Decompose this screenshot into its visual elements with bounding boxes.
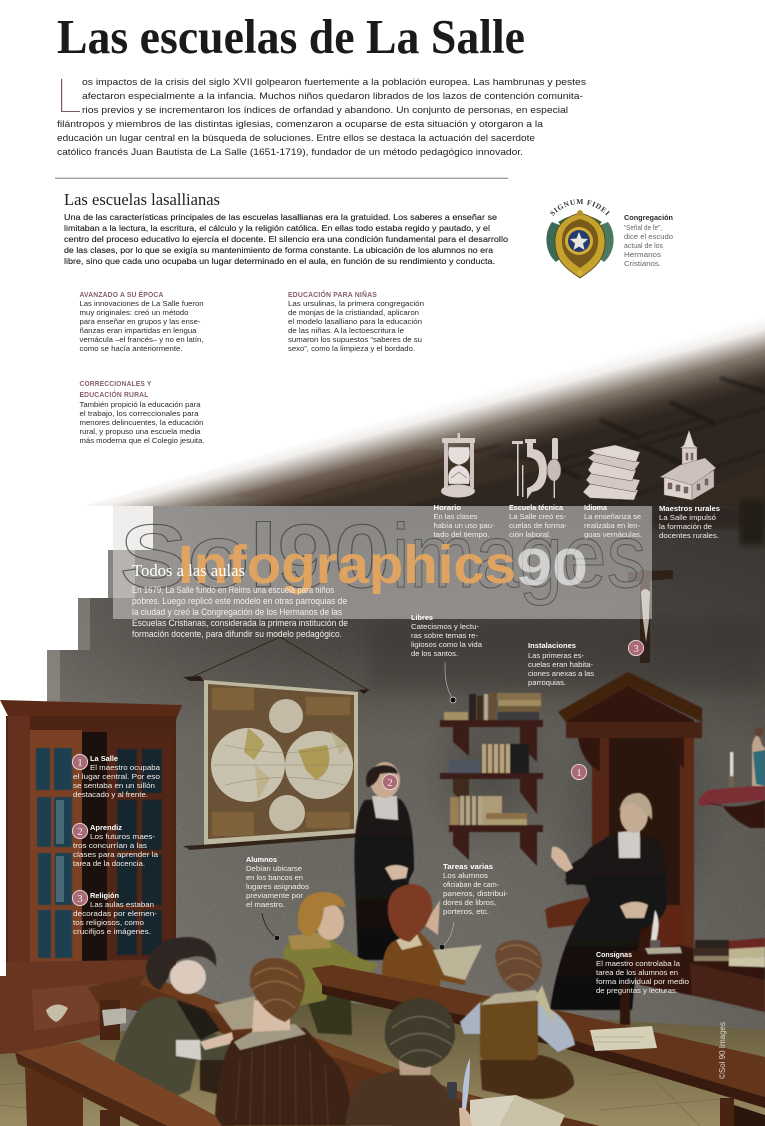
watermark: Sol90 (120, 507, 390, 607)
badge 2 on apprentice (382, 774, 398, 790)
intro text: educación un lugar central en la búsqueda de soluciones. Entre ellos se destaca la actuación del sacerdote (57, 133, 535, 143)
text block: Educación para niñas: EDUCACIÓN PARA NIÑAS (288, 290, 377, 299)
text block: Todos a las aulas: pobres. Luego replicó este modelo en otras parroquias de (132, 596, 347, 606)
text block: Correccionales y educación rural: rural, y propuso una escuela media (80, 427, 201, 436)
text block: Correccionales y educación rural (80, 379, 204, 445)
intro text: rios previos y se incrementaron los índices de orfandad y abandono. Un conjunto de personas, en especial (82, 105, 568, 115)
body text: las escuelas lasallianas (64, 212, 508, 266)
caption: Escuela técnica: La Salle creó es- (509, 512, 567, 521)
callout: Instalaciones: cuelas eran habita- (528, 660, 594, 669)
student bench front row (15, 1042, 235, 1126)
callout: Libres: de los santos. (411, 649, 458, 658)
floor (0, 1000, 765, 1126)
numbered note 1: La Salle: el lugar central. Por eso (73, 772, 160, 781)
callout: Alumnos: Debían ubicarse (246, 864, 302, 873)
world map (183, 637, 370, 850)
caption: Horario: En las clases (434, 512, 478, 521)
numbered note 2: Aprendiz: clases para aprender la (73, 850, 159, 859)
callout: Instalaciones: ciones anexas a las (528, 669, 594, 678)
copyright credit: ©Sol 90 Images (718, 1022, 727, 1079)
callout: Instalaciones: parroquias. (528, 678, 566, 687)
text block: Avanzado a su época: AVANZADO A SU ÉPOCA (80, 290, 164, 299)
callout: Alumnos: lugares asignados (246, 882, 309, 891)
numbered note 1: La Salle (72, 754, 161, 799)
student: green coat (108, 937, 262, 1108)
caption: Horario: Horario (434, 503, 461, 512)
callout: Alumnos: previamente por (246, 891, 304, 900)
badge 1 on chair (571, 764, 587, 780)
icon: tools (512, 438, 561, 499)
student: green shirt (284, 892, 378, 1035)
intro text (57, 70, 586, 157)
text block: Todos a las aulas: la ciudad y creó la Congregación de los Hermanos de las (132, 607, 342, 617)
body text: las escuelas lasallianas: centro del proceso educativo lo ejercía el docente. El silencio era una condición fundamental para el desarrollo (64, 234, 508, 244)
caption: Horario: había un uso pau- (434, 521, 495, 530)
text block: Correccionales y educación rural: También propició la educación para (80, 400, 201, 409)
student: ochre tunic (382, 884, 482, 1010)
canopied chair (540, 670, 730, 960)
callout: Alumnos: el maestro. (246, 900, 285, 909)
callout: Instalaciones: Las primeras es- (528, 651, 585, 660)
caption: Congregación: Cristianos. (624, 259, 661, 268)
numbered note 2: Aprendiz: 2 (77, 826, 83, 838)
ceiling (83, 312, 765, 530)
body text: las escuelas lasallianas: Una de las características principales de las escuelas lasallianas era la gratuidad. Los saberes a enseñar se (64, 212, 497, 222)
caption: Idioma (584, 503, 642, 539)
numbered note 3: Religión: Religión (90, 891, 119, 900)
numbered note 2: Aprendiz: Aprendiz (90, 823, 122, 832)
callout: Alumnos (246, 855, 309, 941)
apprentice (354, 762, 414, 960)
watermark: Infographics (178, 535, 516, 595)
numbered note 3: Religión (72, 890, 158, 936)
callout: Tareas varias: Tareas varias (443, 862, 493, 871)
student: vest (460, 940, 575, 1099)
badge 3 on crucifix: 3 (633, 643, 639, 655)
text block: Educación para niñas: Las ursulinas, la primera congregación (288, 299, 424, 308)
caption: Horario: tado del tiempo. (434, 530, 490, 539)
callout: Libres: Catecismos y lectu- (411, 622, 480, 631)
callout: Tareas varias: porteros, etc. (443, 907, 489, 916)
text block: Todos a las aulas (132, 585, 348, 639)
numbered note 3: Religión: Las aulas estaban (90, 900, 154, 909)
badge 1 on chair: 1 (576, 767, 582, 779)
numbered note 3: Religión: decoradas por elemen- (73, 909, 158, 918)
watermark (113, 506, 652, 619)
heading: Las escuelas lasallianas: Las escuelas lasallianas (64, 190, 220, 209)
caption: Horario (434, 503, 495, 539)
scroll on bench (590, 1026, 657, 1051)
text block: Educación para niñas: de las niñas. A la lectoescritura le (288, 326, 404, 335)
callout: Alumnos: en los bancos en (246, 873, 303, 882)
desk with books (620, 938, 765, 1025)
text block: Avanzado a su época: Las innovaciones de La Salle fueron (80, 299, 204, 308)
callout: Tareas varias: dores de libros, (443, 898, 496, 907)
caption: Congregación: Congregación (624, 213, 673, 222)
icon: hourglass (441, 433, 475, 498)
callout: Tareas varias: paneros, distribui- (443, 889, 509, 898)
icon: emblem Signum Fidei (546, 199, 614, 278)
icon: stack of books (583, 445, 640, 500)
student: striped sweater (215, 958, 351, 1126)
text block: Educación para niñas: de monjas de la cristiandad, aplicaron (288, 308, 419, 317)
callout: Consignas: El maestro controlaba la (596, 959, 681, 968)
caption: Escuela técnica (509, 503, 568, 539)
watermark: images (392, 507, 646, 607)
numbered note 1: La Salle: 1 (77, 757, 83, 769)
text block: Avanzado a su época: ñanzas eran impartidas en lengua (80, 326, 197, 335)
caption: Maestros rurales: La Salle impulsó (659, 513, 716, 522)
icon: emblem Signum Fidei: SIGNUM FIDEI (550, 199, 610, 216)
student bench back row (312, 965, 765, 1126)
intro text: católico francés Juan Bautista de La Salle (1651-1719), fundador de un método pedagógico innovador. (57, 147, 523, 157)
text block: Correccionales y educación rural: más moderna que el Colegio jesuita. (80, 436, 204, 445)
inkwell and quill (447, 1058, 470, 1110)
text block: Correccionales y educación rural: EDUCACIÓN RURAL (80, 390, 149, 399)
text block: Avanzado a su época: vernácula –el francés– y no en latín, (80, 335, 204, 344)
caption: Maestros rurales (659, 504, 720, 540)
text block: Todos a las aulas: En 1679, La Salle fundó en Reims una escuela para niños (132, 585, 334, 595)
body text: las escuelas lasallianas: libre, sino que cada uno ocupaba un lugar determinado en el aula, en función de su rendimiento y conducta. (64, 256, 495, 266)
callout: Instalaciones (528, 641, 594, 687)
text block: Educación para niñas (288, 290, 424, 353)
badge 2 on apprentice: 2 (387, 777, 393, 789)
bookcase (0, 700, 182, 1075)
text block: Todos a las aulas: Escuelas Cristianas, considerada la primera institución de (132, 618, 348, 628)
caption: Congregación: actual de los (624, 241, 663, 250)
numbered note 2: Aprendiz: Los futuros maes- (90, 832, 156, 841)
text block: Avanzado a su época: como se hacía anteriormente. (80, 344, 182, 353)
caption: Congregación (624, 213, 673, 268)
numbered note 3: Religión: tos religiosos, como (73, 918, 144, 927)
intro text: L (57, 70, 84, 123)
text block: Correccionales y educación rural: menores delincuentes, la educación (80, 418, 204, 427)
title: Las escuelas de La Salle (57, 9, 525, 64)
heading: Todos a las aulas: Todos a las aulas (132, 561, 245, 580)
numbered note 1: La Salle: destacado y al frente. (73, 790, 148, 799)
callout: Consignas: forma individual por medio (596, 977, 689, 986)
numbered note 3: Religión: crucifijos e imágenes. (73, 927, 151, 936)
caption: Maestros rurales: la formación de (659, 522, 712, 531)
wall shelves with books (420, 690, 560, 866)
wall altar (698, 728, 765, 828)
numbered note 2: Aprendiz: tros concurrían a las (73, 841, 147, 850)
text block: Avanzado a su época (80, 290, 204, 353)
caption: Maestros rurales: docentes rurales. (659, 531, 719, 540)
callout: Libres: Libres (411, 613, 433, 622)
caption: Maestros rurales: Maestros rurales (659, 504, 720, 513)
intro text: filántropos y miembros de las distintas iglesias, comenzaron a ocuparse de esta situación y otorgaron a la (57, 119, 544, 129)
caption: Congregación: “Señal de fe”, (624, 223, 662, 232)
student: brown sweater, seen from behind (345, 998, 470, 1126)
watermark: 90 (516, 539, 588, 597)
callout: Consignas: Consignas (596, 950, 632, 959)
caption: Escuela técnica: ción laboral. (509, 530, 551, 539)
text block: Avanzado a su época: para enseñar en grupos y las ense- (80, 317, 201, 326)
caption: Idioma: Idioma (584, 503, 608, 512)
text block: Todos a las aulas: formación docente, para difundir su modelo pedagógico. (132, 629, 342, 639)
text block: Correccionales y educación rural: el trabajo, los correccionales para (80, 409, 199, 418)
callout: Tareas varias: Los alumnos (443, 871, 488, 880)
icon: church (660, 430, 716, 500)
text block: Avanzado a su época: muy originales: creó un método (80, 308, 188, 317)
crucifix (628, 570, 673, 663)
text block: Educación para niñas: sumaron los supuestos “saberes de su (288, 335, 422, 344)
body text: las escuelas lasallianas: de las clases, por lo que se exigía su mantenimiento de forma constante. La ubicación de los alumnos no era (64, 245, 493, 255)
caption: Congregación: dice el escudo (624, 232, 673, 241)
callout: Libres: ligiosos como la vida (411, 640, 483, 649)
callout: Consignas (596, 950, 689, 995)
body text: las escuelas lasallianas: limitaban a la lectura, la escritura, el cálculo y la religión católica. En ellas todo estaba regido y pautado, y el (64, 223, 490, 233)
caption: Congregación: Hermanos (624, 250, 661, 259)
caption: Idioma: realizaba en len- (584, 521, 641, 530)
callout: Consignas: de preguntas y lecturas. (596, 986, 678, 995)
callout: Instalaciones: Instalaciones (528, 641, 576, 650)
intro text: afectaron especialmente a la infancia. Muchos niños quedaron librados de los lazos de contención comunita- (82, 91, 583, 101)
callout: Libres: ras sobre temas re- (411, 631, 479, 640)
callout: Alumnos: Alumnos (246, 855, 277, 864)
classroom wall (47, 500, 765, 1060)
caption: Escuela técnica: cuelas de forma- (509, 521, 568, 530)
text block: Correccionales y educación rural: CORRECCIONALES Y (80, 379, 152, 388)
callout: Consignas: tarea de los alumnos en (596, 968, 678, 977)
teacher (545, 793, 682, 1010)
numbered note 1: La Salle: La Salle (90, 754, 118, 763)
intro text: os impactos de la crisis del siglo XVII golpearon fuertemente a la población europea. Las hambrunas y pestes (82, 77, 586, 87)
callout: Libres (411, 613, 483, 703)
badge 3 on crucifix (628, 640, 644, 656)
caption: Idioma: La enseñanza se (584, 512, 641, 521)
numbered note 1: La Salle: se sentaba en un sillón (73, 781, 155, 790)
numbered note 2: Aprendiz: tarea de la docencia. (73, 859, 145, 868)
numbered note 2: Aprendiz (72, 823, 159, 868)
numbered note 1: La Salle: El maestro ocupaba (90, 763, 161, 772)
text block: Educación para niñas: sexo”, como la limpieza y el bordado. (288, 344, 415, 353)
open book (459, 1095, 565, 1126)
callout: Tareas varias (439, 862, 509, 950)
caption: Escuela técnica: Escuela técnica (509, 503, 564, 512)
caption: Idioma: guas vernáculas. (584, 530, 642, 539)
callout: Tareas varias: oficiaban de cam- (443, 880, 500, 889)
numbered note 3: Religión: 3 (77, 893, 83, 905)
student bench middle row (88, 975, 600, 1126)
text block: Educación para niñas: el modelo lasalliano para la educación (288, 317, 422, 326)
